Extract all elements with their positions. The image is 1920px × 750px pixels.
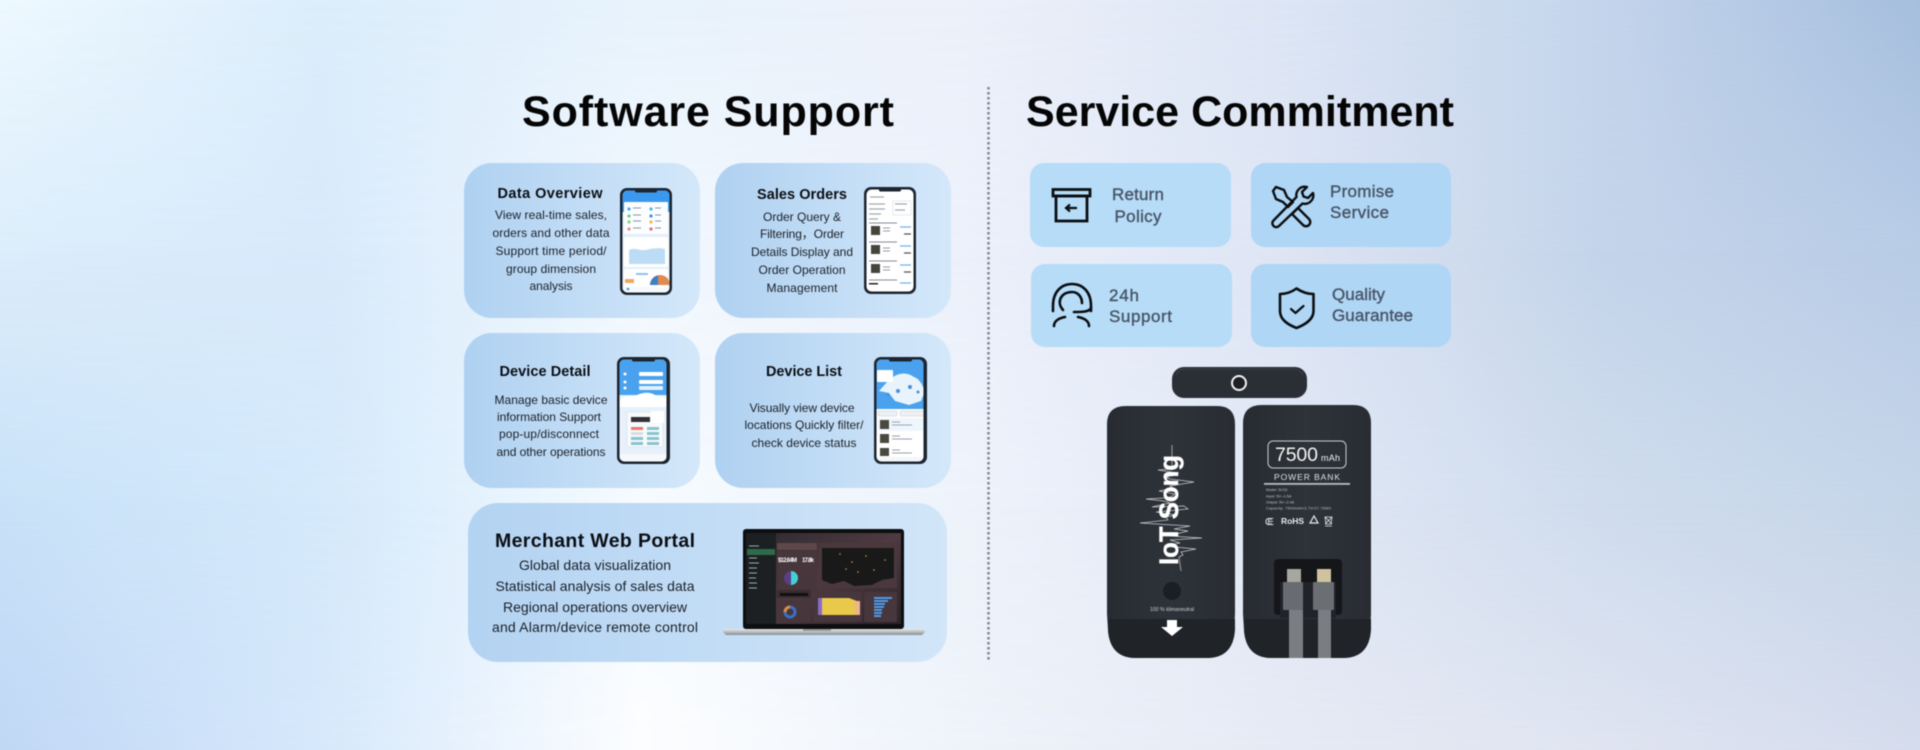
- heading: Merchant Web Portal: Merchant Web Portal: [495, 530, 695, 552]
- text: Sales Orders description: Order Operation: [758, 263, 846, 277]
- brand: IoT Song: IoT Song: [1154, 455, 1184, 565]
- text: Merchant Web Portal description: Statistical analysis of sales data: [496, 578, 695, 594]
- text: Data Overview description: orders and other data: [492, 226, 610, 240]
- panel: Merchant Web Portal: [468, 503, 947, 662]
- text: Device Detail description: and other operations: [496, 445, 606, 459]
- panel: Return Policy: [1030, 163, 1231, 247]
- text: Sales Orders description: Order Query &: [763, 210, 841, 224]
- text: Quality Guarantee: [1332, 285, 1413, 325]
- text: Data Overview description: group dimension: [506, 262, 596, 276]
- text: Sales Orders description: Filtering，Order: [760, 227, 844, 241]
- text: Data Overview description: View real-time sales,: [495, 208, 607, 222]
- text: Sales Orders description: [751, 210, 853, 295]
- text: Device Detail description: [494, 393, 608, 459]
- text: Return Policy: [1112, 185, 1164, 226]
- text: Promise Service: Service: [1330, 203, 1389, 222]
- panel: 24h Support: [1031, 264, 1232, 347]
- title: Service Commitment: Service Commitment: [1026, 88, 1454, 136]
- heading: Sales Orders: Sales Orders: [757, 187, 847, 203]
- panel: Device Detail: [464, 333, 700, 488]
- text: Data Overview description: Support time period/: [496, 244, 607, 258]
- icon: return box: [1053, 190, 1090, 221]
- text: Return Policy: Return: [1112, 185, 1164, 204]
- power bank: back view: POWER BANK: [1274, 472, 1340, 482]
- text: 24h Support: Support: [1109, 307, 1172, 326]
- phone: order list screen: [864, 187, 916, 294]
- text: Device Detail description: Manage basic device: [494, 393, 608, 407]
- text: Sales Orders description: Management: [766, 281, 838, 295]
- text: Merchant Web Portal description: Global data visualization: [519, 557, 671, 573]
- text: Device List description: check device status: [752, 436, 856, 450]
- text: Device List description: [744, 401, 864, 450]
- phone: dashboard screen: [620, 188, 672, 295]
- panel: Quality Guarantee: [1251, 264, 1451, 347]
- certification marks: RoHS: [1281, 516, 1304, 526]
- icon: wrench and screwdriver: [1272, 187, 1313, 227]
- laptop: web dashboard: 17.8k: [802, 558, 815, 564]
- text: Sales Orders description: Details Display and: [751, 245, 853, 259]
- specs text: Capacity: 7500mAh/3.7V/27.75Wh: [1266, 506, 1331, 510]
- power bank: front view: 100 % klimaneutral: [1150, 607, 1194, 613]
- power bank: back view: 7500: [1275, 444, 1318, 466]
- icon: shield with check: [1280, 288, 1314, 328]
- text: Promise Service: [1330, 182, 1394, 222]
- panel: Sales Orders: [715, 163, 951, 318]
- panel: Data Overview: [464, 163, 700, 318]
- text: Device List description: Visually view device: [750, 401, 855, 415]
- title: Software Support: Software Support: [522, 88, 894, 136]
- text: 24h Support: [1109, 286, 1172, 326]
- phone: device detail screen: [617, 357, 670, 464]
- panel: Promise Service: [1251, 163, 1451, 247]
- heading: Device List: Device List: [766, 364, 842, 380]
- text: Return Policy: Policy: [1114, 207, 1162, 226]
- power bank: back view: mAh: [1321, 453, 1340, 463]
- phone: device map screen: [874, 357, 927, 464]
- certification marks: CE: [1265, 517, 1274, 528]
- specs text: [1266, 488, 1331, 510]
- text: Merchant Web Portal description: Regional operations overview: [503, 599, 688, 615]
- power bank: top view: [1172, 367, 1307, 398]
- product: power bank: [1107, 367, 1371, 658]
- cable slot: [1274, 559, 1342, 658]
- text: Device Detail description: pop-up/disconnect: [499, 427, 600, 441]
- specs text: Input: 5V⎓1.5A: [1266, 494, 1292, 498]
- text: Merchant Web Portal description: [492, 557, 698, 635]
- certification marks: [1265, 516, 1332, 528]
- text: Promise Service: Promise: [1330, 182, 1394, 201]
- laptop: web dashboard: $12.64M: [778, 558, 797, 564]
- specs text: Model: SC03: [1266, 488, 1287, 492]
- specs text: Output: 5V⎓2.4A: [1266, 500, 1295, 504]
- laptop: web dashboard: [723, 529, 925, 635]
- panel: Device List: [715, 333, 951, 488]
- heading: Device Detail: Device Detail: [500, 364, 590, 380]
- text: Device Detail description: information Support: [497, 410, 602, 424]
- text: Merchant Web Portal description: and Alarm/device remote control: [492, 619, 698, 635]
- text: Data Overview description: [492, 208, 610, 293]
- text: Device List description: locations Quickly filter/: [744, 418, 864, 432]
- heading: Data Overview: Data Overview: [498, 186, 603, 202]
- power bank: back view: [1243, 405, 1371, 658]
- text: Data Overview description: analysis: [530, 279, 572, 293]
- text: Quality Guarantee: Guarantee: [1332, 306, 1413, 325]
- text: Quality Guarantee: Quality: [1332, 285, 1386, 304]
- power bank: front view: [1107, 406, 1235, 658]
- icon: support headset: [1053, 284, 1091, 326]
- text: 24h Support: 24h: [1109, 286, 1139, 305]
